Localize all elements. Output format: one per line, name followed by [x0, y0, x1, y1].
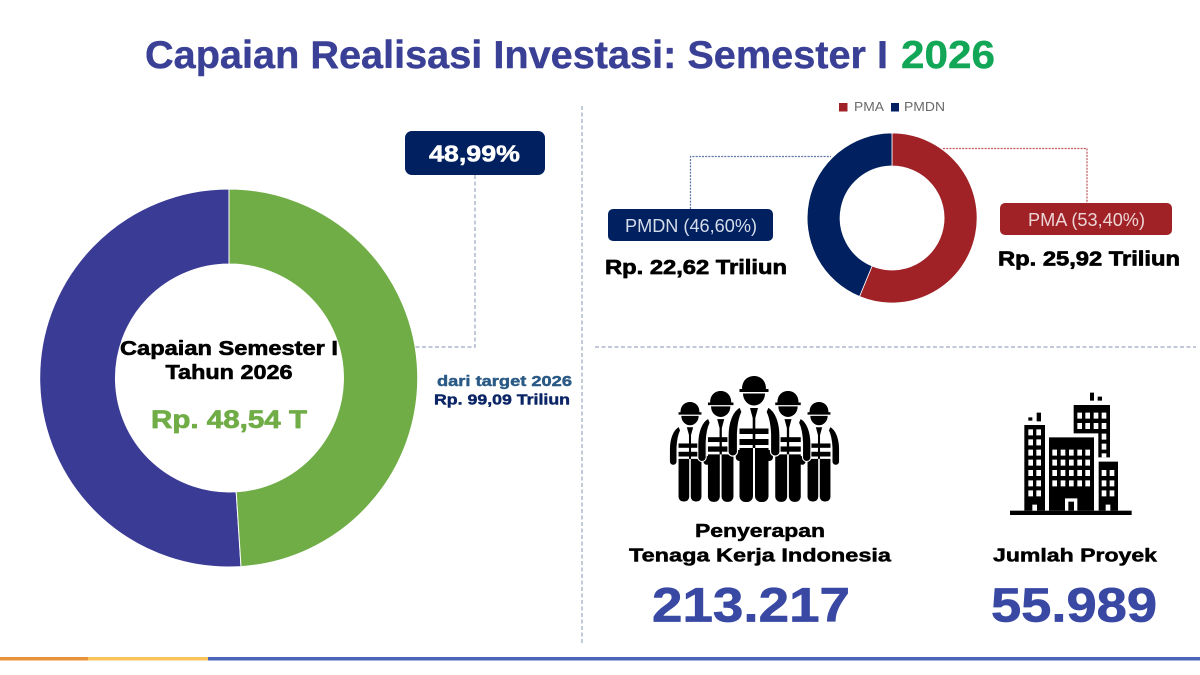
PMA badge — [1000, 203, 1172, 235]
donut chart: realization vs target — [40, 189, 418, 567]
icon: group of workers — [669, 376, 840, 502]
donut centre value: Rp. 48,54 T — [151, 406, 307, 434]
workforce label: Penyerapan — [695, 520, 825, 541]
panel: total realization donut — [40, 131, 572, 567]
PMA value: Rp. 25,92 Triliun — [998, 248, 1180, 270]
callout: percentage badge — [405, 131, 545, 175]
vertical divider — [581, 106, 583, 645]
panel: workforce — [629, 376, 892, 632]
workforce label: Tenaga Kerja Indonesia — [629, 544, 892, 566]
donut chart: PMA vs PMDN — [807, 133, 977, 303]
icon: city buildings — [1010, 393, 1132, 515]
legend: PMA — [854, 99, 884, 114]
workforce label — [629, 520, 892, 566]
donut centre label — [120, 337, 338, 384]
target text: Rp. 99,09 Triliun — [434, 392, 570, 408]
donut centre label: Capaian Semester I — [120, 337, 338, 360]
legend: PMDN — [904, 99, 945, 114]
title: 2026 — [901, 34, 995, 77]
callout connector — [415, 175, 475, 347]
target text — [434, 373, 572, 408]
PMDN badge: PMDN (46,60%) — [625, 216, 757, 236]
PMA badge: PMA (53,40%) — [1028, 210, 1145, 230]
panel: projects — [991, 393, 1158, 632]
connector: PMDN — [690, 156, 831, 209]
workforce value: 213.217 — [652, 580, 850, 632]
title: Capaian Realisasi Investasi: Semester I — [145, 34, 888, 77]
callout: percentage badge: 48,99% — [429, 140, 520, 166]
projects value: 55.989 — [991, 580, 1157, 632]
target text: dari target 2026 — [437, 373, 572, 390]
footer stripe — [0, 657, 1200, 660]
panel: PMA and PMDN breakdown — [605, 99, 1180, 303]
legend — [839, 99, 945, 114]
horizontal divider — [595, 346, 1196, 348]
PMDN value: Rp. 22,62 Triliun — [605, 257, 787, 279]
projects label: Jumlah Proyek — [993, 544, 1158, 566]
connector: PMA — [943, 148, 1087, 203]
donut centre label: Tahun 2026 — [166, 361, 292, 384]
PMDN badge — [608, 209, 773, 241]
